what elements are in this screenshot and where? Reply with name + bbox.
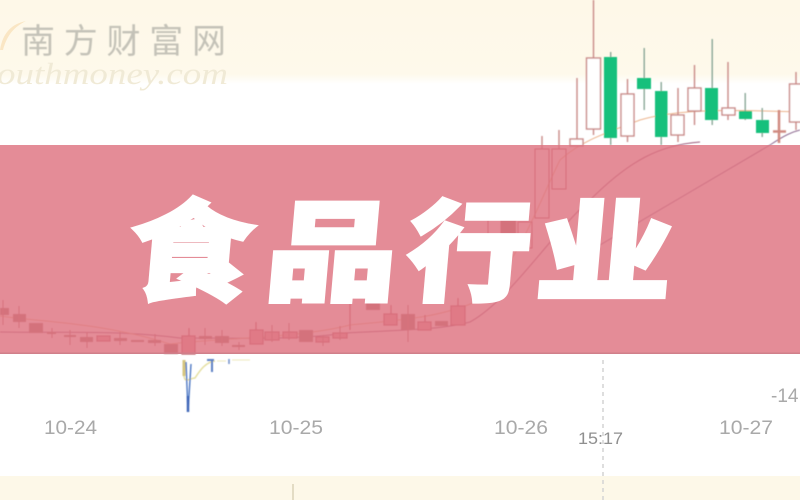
date 10-24: 10-24 <box>44 418 97 439</box>
upper candles, green <box>604 39 769 145</box>
bottom cream footer band <box>0 476 800 500</box>
title character 3: 行 <box>401 165 539 324</box>
lower wicks <box>3 300 408 350</box>
axis value label: -14 <box>771 386 799 407</box>
thin red candle <box>773 110 786 143</box>
date 10-25: 10-25 <box>269 418 323 439</box>
date 10-26: 10-26 <box>494 418 548 439</box>
logo arc <box>0 21 26 50</box>
date 10-27: 10-27 <box>719 418 773 439</box>
title <box>122 164 681 325</box>
upper candles, hollow <box>542 0 800 149</box>
logo chinese name: 南方财富网 <box>21 14 226 63</box>
footer tick <box>292 484 294 500</box>
crosshair vertical dashed line <box>602 360 604 500</box>
axis date labels <box>44 418 773 439</box>
logo url: outhmoney.com <box>0 56 228 91</box>
lower candles, solid <box>0 215 516 354</box>
title character 2: 品 <box>260 165 406 325</box>
crosshair time label: 15:17 <box>578 429 623 448</box>
candlestick chart <box>0 0 800 354</box>
lower candles, hollow <box>97 298 465 354</box>
pink title band <box>0 145 800 354</box>
title character 4: 业 <box>531 164 681 324</box>
volume indicator below band <box>184 359 250 412</box>
watermark logo <box>0 14 228 91</box>
middle candles seen through band <box>488 149 566 248</box>
title character 1: 食 <box>122 165 261 324</box>
moving average lines <box>0 110 800 344</box>
top cream header band <box>0 0 800 84</box>
